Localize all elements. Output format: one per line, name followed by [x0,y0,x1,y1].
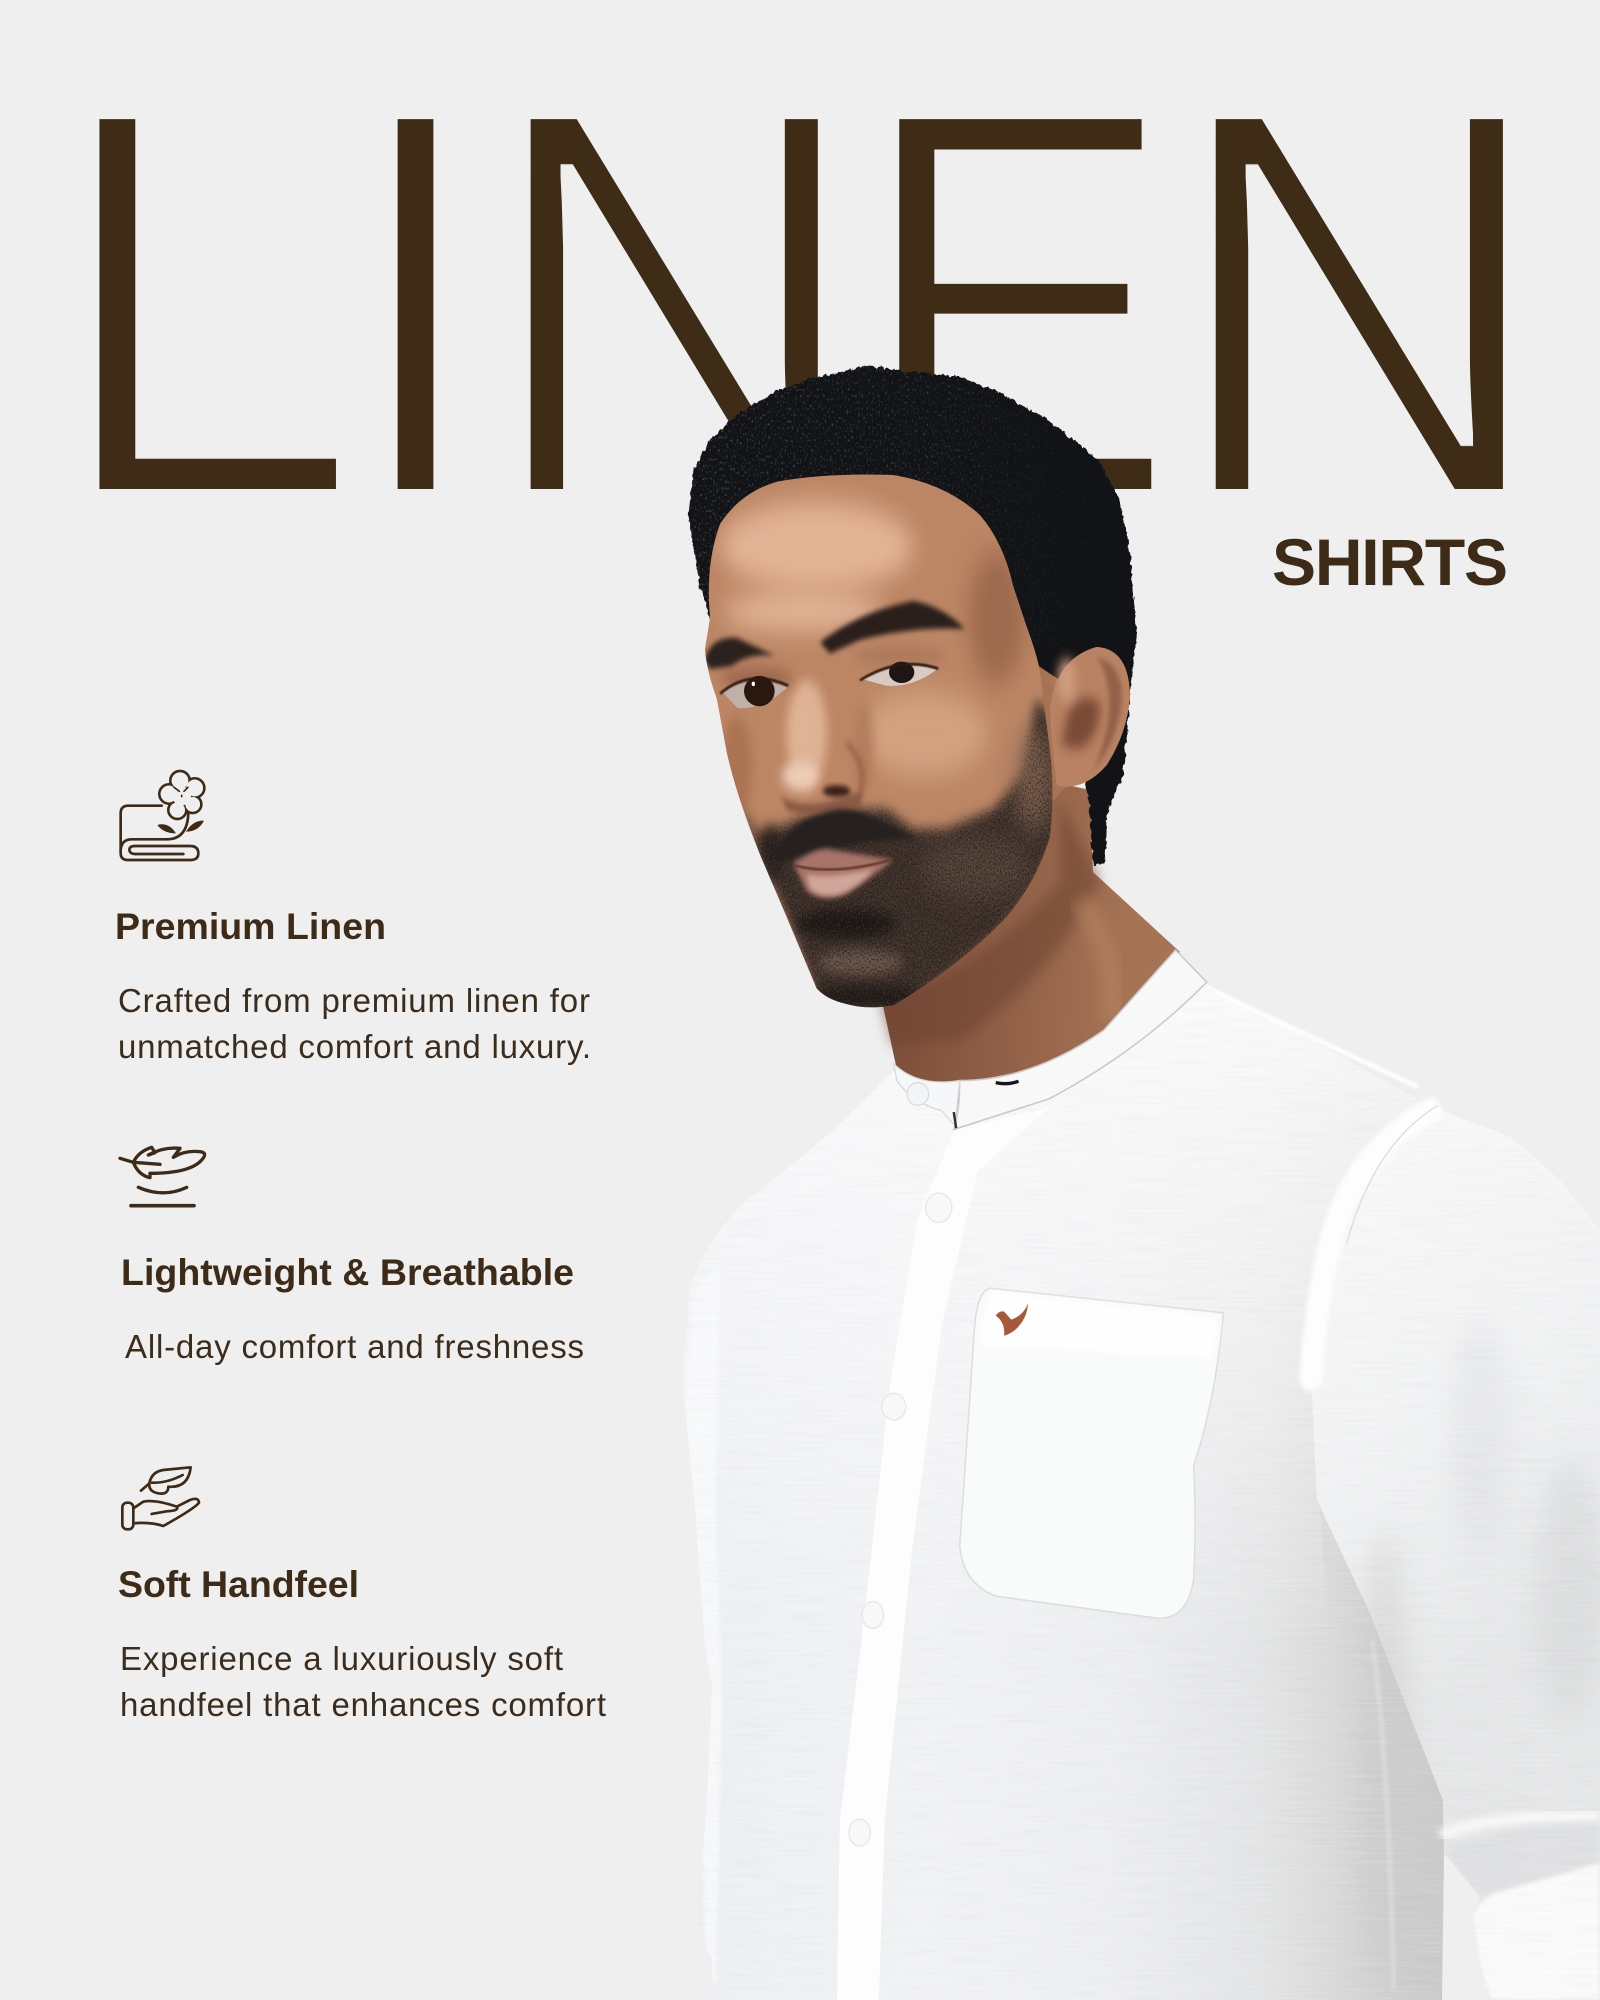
subtitle: SHIRTS: SHIRTS [1272,525,1508,599]
nose shadow and nostril [782,790,863,816]
face [705,474,1052,1008]
text: premium linen description: unmatched comfort and luxury. [118,1028,591,1065]
heading: Soft Handfeel: Soft Handfeel [118,1563,359,1605]
buttons [849,1193,952,1846]
yoke and sleeve seam [1215,992,1418,1087]
text: soft handfeel description: Experience a luxuriously soft [120,1640,563,1677]
hair [680,359,1147,866]
button placket [837,1107,1050,2000]
photo: man in white linen shirt [680,359,1600,2000]
right eyebrow [820,601,965,654]
text: lightweight description: All-day comfort and freshness [125,1328,584,1365]
white linen shirt [680,780,1600,2000]
moustache [773,809,918,863]
text: premium linen description: Crafted from premium linen for [118,982,590,1019]
shirt sleeve [1310,1107,1600,2000]
logo embroidery [996,1304,1028,1336]
eye socket shadows [720,666,793,691]
title: LINEN: N [1166,0,1553,613]
title: LINEN [43,0,1553,613]
text: premium linen description [118,982,591,1065]
ear [1050,647,1130,787]
icon: towel with flower [121,771,204,860]
title: LINEN: L [43,0,364,613]
left eye [720,676,788,708]
beard [733,698,1060,1020]
icon: hand with leaf [122,1467,199,1529]
heading: Premium Linen: Premium Linen [115,905,386,947]
chest pocket [960,1288,1224,1618]
title: LINEN: E [855,0,1177,613]
lips [793,849,893,898]
linen texture [680,950,1600,2000]
title: LINEN: N [481,0,867,613]
neck [868,780,1180,1105]
text: soft handfeel description [120,1640,606,1723]
right eye [860,662,938,686]
skin lighting [968,551,1025,685]
title: LINEN: I [338,0,493,613]
shirt body [682,950,1444,2000]
collar [894,950,1207,1129]
left sleeve sliver [699,1512,720,1974]
heading: Lightweight & Breathable: Lightweight & Breathable [121,1251,574,1293]
left eyebrow [704,638,775,669]
icon: feather [120,1147,205,1206]
skin behind ear [1033,662,1073,801]
head [680,359,1147,1024]
text: soft handfeel description: handfeel that enhances comfort [120,1686,606,1723]
